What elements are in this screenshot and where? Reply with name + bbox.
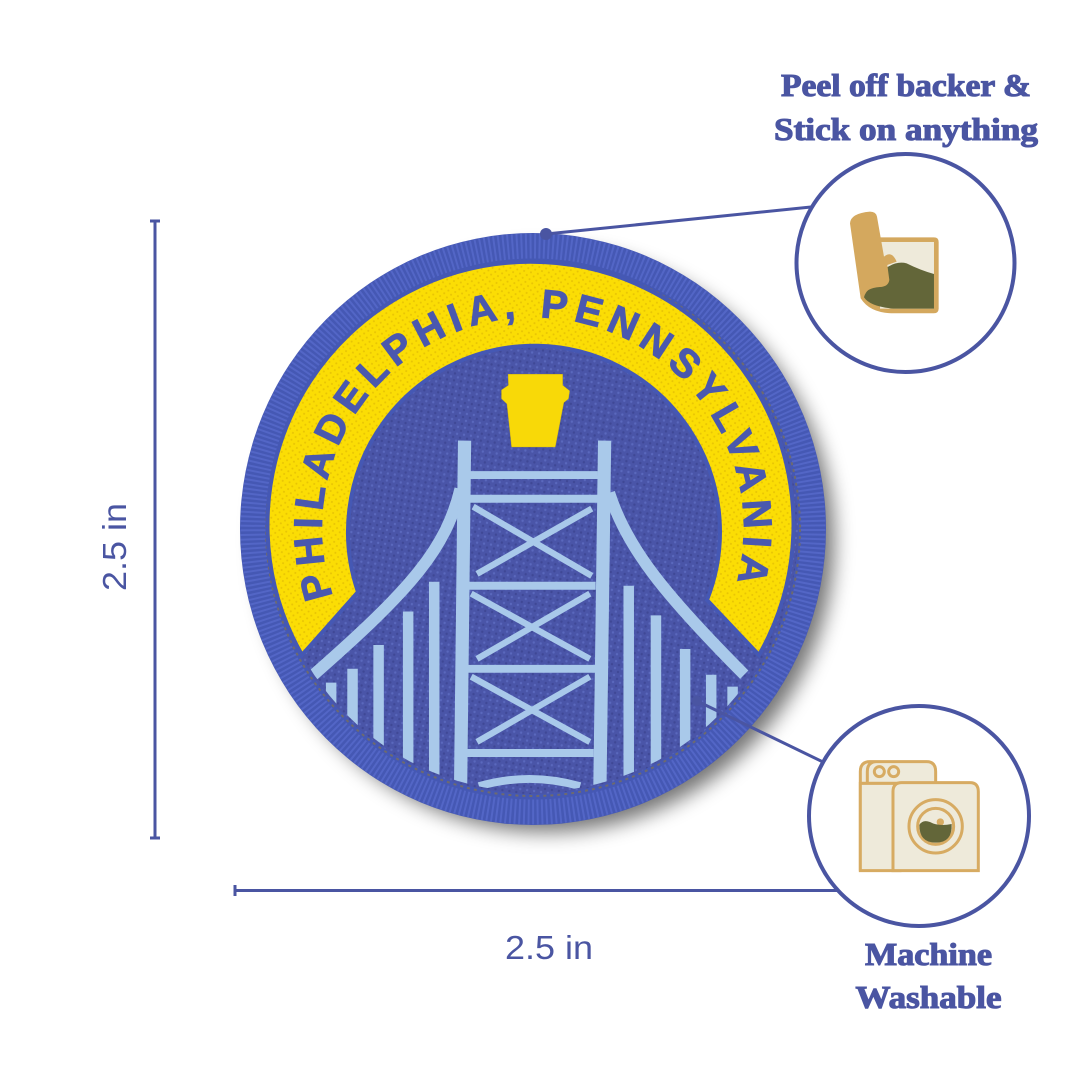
yellow arch band (268, 262, 794, 655)
callout arrow: backing (540, 207, 811, 240)
height dimension (96, 221, 160, 838)
callout heading: peel off (774, 67, 1038, 147)
callout circle: washable (809, 706, 1029, 926)
keystone (502, 374, 570, 447)
callout arrow: washable (692, 696, 823, 762)
icon: peeling sticker (850, 212, 939, 313)
callout heading: washable: Machine (865, 936, 992, 972)
suspender cables (326, 582, 738, 776)
main cables (314, 489, 744, 675)
arched patch title: PHILADELPHIA, PENNSYLVANIA (294, 289, 772, 602)
patch drop shadow (258, 250, 834, 832)
tower horizontal beams (467, 475, 598, 786)
callout heading: washable: Washable (856, 979, 1002, 1015)
tower cross bracing (471, 507, 592, 742)
patch (240, 233, 848, 846)
width label: 2.5 in (505, 929, 593, 966)
icon: washing machine (860, 762, 978, 871)
bridge towers (460, 441, 605, 813)
callout heading: peel off: Stick on anything (774, 111, 1038, 147)
callout heading: peel off: Peel off backer & (781, 67, 1031, 103)
infographic: patch size and features (102, 73, 1038, 1009)
callout heading: washable (856, 936, 1002, 1015)
width dimension (235, 885, 838, 966)
callout circle: peel off (796, 154, 1014, 372)
patch blue field (268, 264, 798, 794)
height label: 2.5 in (96, 503, 133, 591)
bridge illustration (314, 441, 744, 813)
patch border (240, 233, 826, 825)
